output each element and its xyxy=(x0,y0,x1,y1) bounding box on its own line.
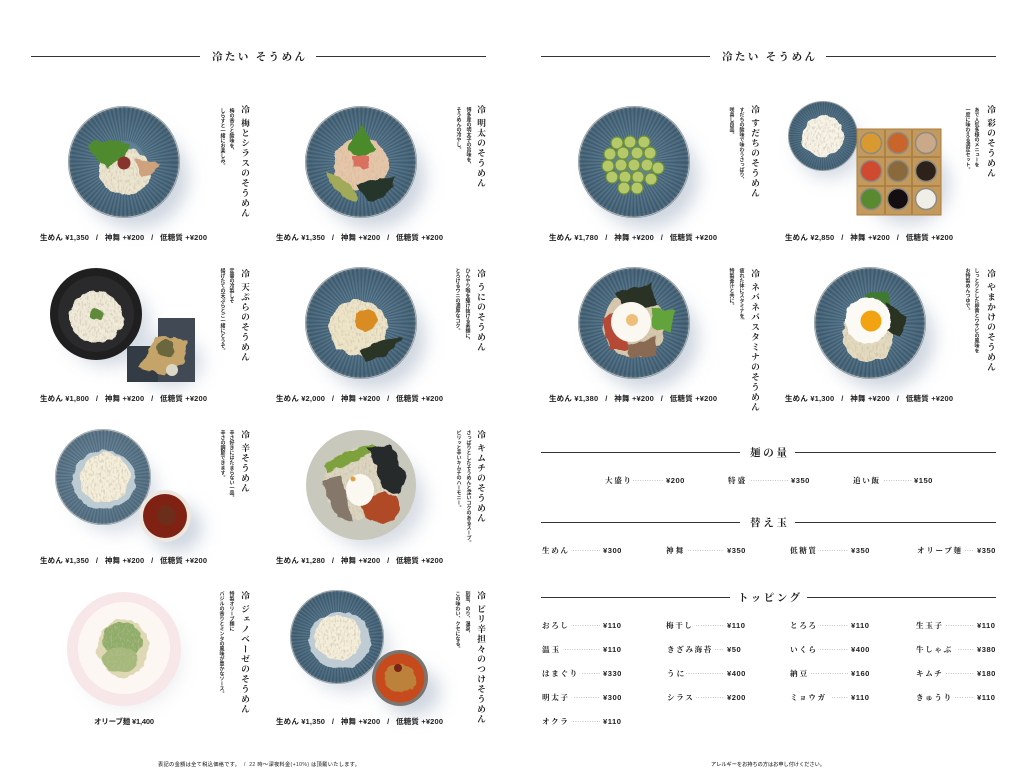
dish photo: spicy dandan tsuke somen xyxy=(290,590,440,716)
dish description: ume shirasu: 梅の香りと酸味を、 xyxy=(228,107,234,153)
section: toppings: キムチ xyxy=(916,669,943,678)
dish description: spicy: 辛さ好きにはたまらない一品。 xyxy=(228,429,234,500)
section: toppings: 温玉 xyxy=(542,644,561,654)
dish photo: tempura somen xyxy=(50,268,202,388)
dish description: uni: ひんやり喉を駆け抜ける素麺に、 xyxy=(464,268,470,343)
dish description: nine-sauce set: 一度に味わえる満足セット。 xyxy=(964,107,970,172)
section: noodle refills: 生めん xyxy=(542,545,570,555)
section: toppings: うに xyxy=(667,668,686,678)
section: noodle refills: ¥350 xyxy=(851,546,870,555)
price line: mentaiko: 生めん ¥1,350 / 神舞 +¥200 / 低糖質 +¥200 xyxy=(276,232,443,242)
section: toppings: ¥110 xyxy=(727,621,745,630)
section: toppings: とろろ xyxy=(790,621,818,630)
dish description: yamakake: お特製めんつゆで。 xyxy=(964,267,970,313)
section: toppings: ¥300 xyxy=(603,693,622,702)
dish photo: mentaiko somen xyxy=(305,106,425,228)
dish photo: nine-sauce set somen xyxy=(788,101,950,225)
price line: spicy: 生めん ¥1,350 / 神舞 +¥200 / 低糖質 +¥200 xyxy=(40,555,207,565)
dish description: tempura: 揚げたての天ぷらとご一緒にどうぞ。 xyxy=(220,267,226,353)
section: toppings: ミョウガ xyxy=(790,693,827,702)
price line: tempura: 生めん ¥1,800 / 神舞 +¥200 / 低糖質 +¥200 xyxy=(40,393,207,403)
dish name: yamakake: 冷 やまかけのそうめん xyxy=(986,268,996,372)
dish description: nine-sauce set xyxy=(964,107,980,172)
dish name: ume shirasu: 冷 梅とシラスのそうめん xyxy=(240,104,250,218)
dish photo: nebaneba stamina somen xyxy=(578,267,698,389)
left page heading: 冷たい そうめん xyxy=(212,50,305,63)
section: toppings: ¥330 xyxy=(603,669,622,678)
dish description: kimchi: ピリッと辛いキムチのハーモニー。 xyxy=(456,430,462,510)
dish name: kimchi: 冷 キムチのそうめん xyxy=(476,429,486,523)
section: toppings: トッピング xyxy=(738,591,800,604)
section: noodle portion: 特盛 xyxy=(728,475,747,485)
section: toppings: はまぐり xyxy=(542,669,579,678)
section: toppings: おろし xyxy=(542,621,570,630)
section: toppings xyxy=(541,591,996,726)
section: toppings: 梅干し xyxy=(666,620,694,630)
dish description: spicy xyxy=(220,429,234,500)
dish name: uni: 冷 うにのそうめん xyxy=(476,268,486,352)
section: noodle refills: ¥350 xyxy=(977,546,996,555)
price line: nebaneba stamina: 生めん ¥1,380 / 神舞 +¥200 / 低糖質 +¥200 xyxy=(549,393,717,403)
footnote: allergy: アレルギーをお持ちの方はお申し付けください。 xyxy=(711,760,825,768)
dish description: yamakake xyxy=(964,267,980,353)
section: toppings: 明太子 xyxy=(542,692,570,702)
price line: genovese: オリーブ麺 ¥1,400 xyxy=(94,716,154,726)
dish description: sudachi xyxy=(728,106,744,182)
price line: yamakake: 生めん ¥1,300 / 神舞 +¥200 / 低糖質 +¥200 xyxy=(785,393,953,403)
dish description: kimchi xyxy=(456,429,472,545)
section: noodle refills xyxy=(541,516,996,555)
section: toppings: 牛しゃぶ xyxy=(916,644,953,654)
section: toppings: ¥110 xyxy=(977,693,995,702)
section: noodle portion: ¥200 xyxy=(666,476,685,485)
price line: kimchi: 生めん ¥1,280 / 神舞 +¥200 / 低糖質 +¥200 xyxy=(276,555,443,565)
section: noodle portion: 追い飯 xyxy=(853,475,881,485)
right page heading: 冷たい そうめん xyxy=(722,50,815,63)
section: toppings: ¥110 xyxy=(977,621,995,630)
section: toppings: ¥200 xyxy=(727,693,746,702)
dish photo: uni somen xyxy=(305,267,425,389)
section: toppings: 生玉子 xyxy=(916,620,944,630)
section: toppings: ¥50 xyxy=(727,645,741,654)
dish name: spicy: 冷 辛そうめん xyxy=(240,429,250,493)
section: toppings: ¥110 xyxy=(603,717,621,726)
section: noodle refills: ¥300 xyxy=(603,546,622,555)
dish description: spicy: 辛さの調節できます。 xyxy=(220,429,226,480)
section: toppings: ¥160 xyxy=(851,669,870,678)
dish description: sudachi: すだちの酸味で味わうさっぱり、 xyxy=(738,106,744,182)
dish description: mentaiko xyxy=(456,106,472,167)
section: noodle refills: ¥350 xyxy=(727,546,746,555)
dish name: genovese: 冷 ジェノベーゼのそうめん xyxy=(240,590,250,714)
dish description: tempura xyxy=(220,267,234,353)
section: noodle portion xyxy=(541,446,996,485)
section: noodle refills: オリーブ麺 xyxy=(917,545,963,555)
dish description: nebaneba stamina: 特製釜汁と共に。 xyxy=(728,267,734,308)
section: toppings: きざみ海苔 xyxy=(667,644,713,654)
section: toppings: いくら xyxy=(790,644,818,654)
dish description: tempura: 定番の冷製しそ xyxy=(228,267,234,304)
dish name: spicy dandan: 冷 ピリ辛担々のつけそうめん xyxy=(476,590,486,724)
section: toppings: 納豆 xyxy=(790,668,809,678)
dish description: nine-sauce set: あで人気多様のメニューを xyxy=(974,107,980,167)
dish name: nebaneba stamina: 冷 ネバネバスタミナのそうめん xyxy=(750,268,760,412)
dish description: mentaiko: 博多産の明太子の旨味を、 xyxy=(466,106,472,167)
section: toppings: シラス xyxy=(667,693,694,702)
dish description: kimchi: さっぱりとしたそうめんと深いコクのあるスープ。 xyxy=(466,429,472,545)
price line: ume shirasu: 生めん ¥1,350 / 神舞 +¥200 / 低糖質 +¥200 xyxy=(40,232,207,242)
price line: uni: 生めん ¥2,000 / 神舞 +¥200 / 低糖質 +¥200 xyxy=(276,393,443,403)
dish description: ume shirasu: しらすと一緒にお楽しみ。 xyxy=(220,108,226,168)
section: toppings: ¥400 xyxy=(851,645,870,654)
dish description: genovese xyxy=(218,590,234,696)
dish description: nebaneba stamina xyxy=(728,267,744,320)
dish photo: genovese somen xyxy=(67,592,182,708)
dish name: mentaiko: 冷 明太のそうめん xyxy=(476,104,486,188)
section: toppings: ¥110 xyxy=(603,621,621,630)
dish description: spicy dandan: この味わい、クセになる。 xyxy=(454,591,460,651)
section: toppings: ¥110 xyxy=(851,693,869,702)
dish description: sudachi: 咲喜し良品。 xyxy=(728,106,734,137)
dish description: ume shirasu xyxy=(220,107,234,168)
footnote: pricing: 表記の金額は全て税込価格です。 / 22 時〜深夜料金(+10%) は頂戴いたします。 xyxy=(158,760,360,768)
dish photo: sudachi somen xyxy=(578,106,698,228)
dish photo: yamakake somen xyxy=(814,267,934,389)
dish description: nebaneba stamina: 疲れた体にスタミナを! xyxy=(738,267,744,320)
section: noodle portion: ¥350 xyxy=(791,476,810,485)
price line: nine-sauce set: 生めん ¥2,850 / 神舞 +¥200 / 低糖質 +¥200 xyxy=(785,232,953,242)
dish description: spicy dandan: 刻葱、のり、温泉、 xyxy=(464,590,470,636)
section: noodle refills: 低糖質 xyxy=(790,545,818,555)
section: toppings: ¥110 xyxy=(851,621,869,630)
section: noodle portion: 麺の量 xyxy=(750,446,788,459)
dish description: uni xyxy=(454,268,470,343)
dish description: spicy dandan xyxy=(454,590,470,651)
section: toppings: ¥110 xyxy=(603,645,621,654)
section: toppings: ¥180 xyxy=(977,669,996,678)
price line: spicy dandan: 生めん ¥1,350 / 神舞 +¥200 / 低糖質 +¥200 xyxy=(276,716,443,726)
dish description: genovese: バジルの香りとミンタの風味が豊かなソース。 xyxy=(218,591,224,696)
dish name: tempura: 冷 天ぷらのそうめん xyxy=(240,268,250,362)
dish photo: spicy somen xyxy=(55,429,202,552)
dish name: nine-sauce set: 冷 彩のそうめん xyxy=(986,104,996,178)
dish description: genovese: 特製オリーブ麺に xyxy=(228,590,234,631)
section: noodle portion: ¥150 xyxy=(914,476,933,485)
section: noodle portion: 大盛り xyxy=(605,475,633,485)
dish description: uni: とろけるウニの濃厚なコク。 xyxy=(454,268,460,333)
price line: sudachi: 生めん ¥1,780 / 神舞 +¥200 / 低糖質 +¥200 xyxy=(549,232,717,242)
section: noodle refills: 替え玉 xyxy=(750,516,788,529)
dish photo: ume and shirasu somen xyxy=(68,106,188,228)
section: toppings: ¥400 xyxy=(727,669,746,678)
section: toppings: オクラ xyxy=(542,717,569,726)
dish description: mentaiko: そうめんの冷やし。 xyxy=(456,107,462,152)
dish photo: kimchi somen xyxy=(306,430,425,548)
section: toppings: ¥380 xyxy=(977,645,996,654)
section: toppings: きゅうり xyxy=(916,692,953,702)
dish name: sudachi: 冷 すだちのそうめん xyxy=(750,104,760,198)
dish description: yamakake: しっとりとした卵黄とワサビの風味を xyxy=(974,268,980,353)
section: noodle refills: 神舞 xyxy=(666,545,685,555)
